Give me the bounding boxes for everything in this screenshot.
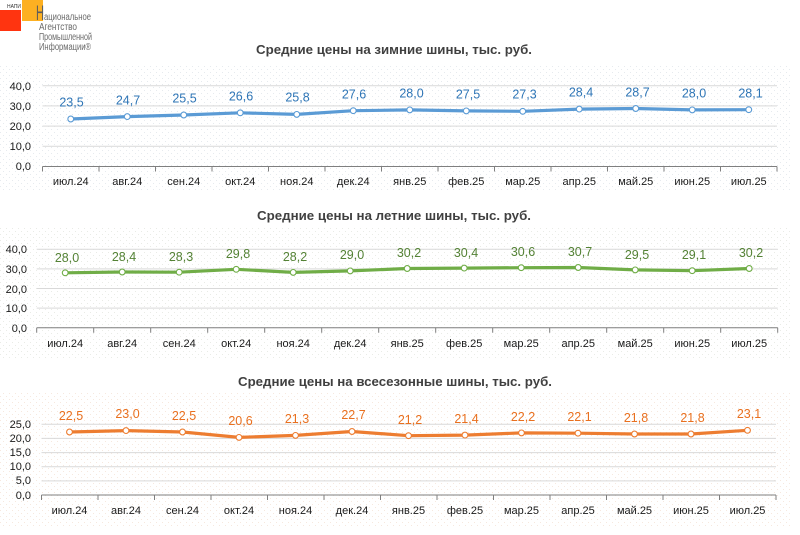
x axis labels: май.25 xyxy=(618,338,653,350)
x axis labels: ноя.24 xyxy=(280,176,313,188)
x axis labels: сен.24 xyxy=(163,338,196,350)
data labels: all-season prices: 21,2 xyxy=(398,413,422,427)
y axis labels: 20,0 xyxy=(10,121,31,133)
x axis labels: май.25 xyxy=(617,505,652,517)
data labels: winter prices: 24,7 xyxy=(116,94,140,108)
data labels: all-season prices: 22,2 xyxy=(511,410,535,424)
x axis labels: апр.25 xyxy=(561,505,595,517)
data labels: summer prices: 28,0 xyxy=(55,251,79,265)
panel: all-season tires chart xyxy=(0,393,790,527)
line series: winter prices xyxy=(68,106,752,122)
x axis labels: июл.24 xyxy=(47,338,83,350)
data labels: summer prices: 28,4 xyxy=(112,250,136,264)
line series: summer prices xyxy=(62,265,752,276)
x axis labels: июн.25 xyxy=(674,176,710,188)
data labels: all-season prices: 22,7 xyxy=(341,408,366,422)
logo: НАПИ xyxy=(7,4,21,10)
x axis labels: мар.25 xyxy=(504,338,539,350)
data labels: summer prices xyxy=(55,245,763,265)
y axis labels: 0,0 xyxy=(16,490,31,502)
x axis labels xyxy=(47,338,767,350)
y axis labels: 30,0 xyxy=(6,264,27,276)
data labels: summer prices: 29,5 xyxy=(625,248,649,262)
y axis labels xyxy=(10,419,31,502)
x axis labels: фев.25 xyxy=(447,505,483,517)
data labels: winter prices: 28,1 xyxy=(738,86,763,100)
x axis labels: июл.25 xyxy=(731,176,767,188)
x axis labels: апр.25 xyxy=(561,338,595,350)
y axis labels: 5,0 xyxy=(16,475,31,487)
data labels: winter prices: 25,8 xyxy=(285,90,310,104)
y axis labels: 30,0 xyxy=(10,101,31,113)
data labels: all-season prices: 21,8 xyxy=(680,411,705,425)
data labels: summer prices: 29,0 xyxy=(340,248,364,262)
data labels: summer prices: 30,4 xyxy=(454,246,478,260)
y axis labels: 20,0 xyxy=(6,284,27,296)
x axis labels: фев.25 xyxy=(446,338,482,350)
logo: ациональное xyxy=(44,12,91,23)
data labels: winter prices xyxy=(59,86,763,110)
x axis labels: дек.24 xyxy=(334,338,367,350)
data labels: all-season prices xyxy=(59,407,761,428)
x axis labels: дек.24 xyxy=(336,505,368,517)
data labels: summer prices: 30,2 xyxy=(397,246,421,260)
x axis labels: июл.24 xyxy=(52,505,87,517)
x axis labels: авг.24 xyxy=(111,505,141,517)
x axis labels: июл.25 xyxy=(731,338,767,350)
data labels: summer prices: 29,1 xyxy=(682,248,706,262)
x axis labels: ноя.24 xyxy=(276,338,310,350)
y axis labels: 25,0 xyxy=(10,419,31,431)
data labels: all-season prices: 21,8 xyxy=(624,411,648,425)
x axis labels: окт.24 xyxy=(225,176,255,188)
logo: Информации® xyxy=(39,41,91,53)
title: winter tires: Средние цены на зимние шины, тыс. руб. xyxy=(256,43,532,57)
y axis labels: 40,0 xyxy=(10,81,31,93)
y axis labels xyxy=(10,81,31,173)
data labels: all-season prices: 22,5 xyxy=(59,409,83,423)
data labels: summer prices: 30,2 xyxy=(739,246,763,260)
y axis labels: 20,0 xyxy=(10,433,31,445)
data labels: winter prices: 28,7 xyxy=(625,86,650,100)
data labels: summer prices: 30,6 xyxy=(511,245,535,259)
data labels: winter prices: 23,5 xyxy=(59,96,84,110)
data labels: all-season prices: 22,5 xyxy=(172,409,196,423)
x axis labels: дек.24 xyxy=(337,176,370,188)
x axis labels: июн.25 xyxy=(674,338,710,350)
data labels: winter prices: 27,6 xyxy=(342,88,366,102)
line series: all-season prices xyxy=(67,427,750,440)
x axis labels: фев.25 xyxy=(448,176,484,188)
data labels: summer prices: 28,2 xyxy=(283,250,307,264)
x axis labels: июн.25 xyxy=(673,505,709,517)
y axis labels xyxy=(6,244,27,335)
data labels: winter prices: 27,3 xyxy=(512,88,537,102)
y axis labels: 40,0 xyxy=(6,244,27,256)
x axis labels: июл.25 xyxy=(730,505,765,517)
data labels: summer prices: 29,8 xyxy=(226,247,250,261)
data labels: winter prices: 26,6 xyxy=(229,90,253,104)
data labels: winter prices: 25,5 xyxy=(172,92,197,106)
title: all-season tires: Средние цены на всесезонные шины, тыс. руб. xyxy=(238,375,552,389)
logo: Промышленной xyxy=(39,32,92,43)
x axis labels: сен.24 xyxy=(167,176,200,188)
x axis labels: апр.25 xyxy=(563,176,596,188)
data labels: all-season prices: 23,1 xyxy=(737,407,761,421)
y axis labels: 10,0 xyxy=(10,461,31,473)
x axis labels: янв.25 xyxy=(391,338,424,350)
x axis labels: авг.24 xyxy=(107,338,137,350)
logo: Н xyxy=(36,2,44,25)
x axis labels: окт.24 xyxy=(224,505,254,517)
data labels: all-season prices: 22,1 xyxy=(567,410,592,424)
title: summer tires: Средние цены на летние шины, тыс. руб. xyxy=(257,209,531,223)
data labels: summer prices: 28,3 xyxy=(169,250,193,264)
data labels: all-season prices: 23,0 xyxy=(115,407,140,421)
y axis labels: 15,0 xyxy=(10,447,31,459)
data labels: summer prices: 30,7 xyxy=(568,245,592,259)
data labels: all-season prices: 21,3 xyxy=(285,412,309,426)
x axis labels: янв.25 xyxy=(392,505,425,517)
data labels: winter prices: 28,0 xyxy=(682,86,706,100)
x axis labels: июл.24 xyxy=(53,176,89,188)
logo xyxy=(0,0,92,53)
data labels: winter prices: 28,4 xyxy=(569,86,593,100)
logo: Агентство xyxy=(39,22,77,33)
data labels: all-season prices: 20,6 xyxy=(228,414,253,428)
x axis labels: янв.25 xyxy=(393,176,426,188)
data labels: all-season prices: 21,4 xyxy=(454,412,479,426)
data labels: winter prices: 27,5 xyxy=(456,88,480,102)
y axis labels: 0,0 xyxy=(16,161,31,173)
x axis labels: сен.24 xyxy=(166,505,199,517)
x axis labels: авг.24 xyxy=(112,176,142,188)
panel: summer tires chart xyxy=(0,228,790,359)
x axis labels: ноя.24 xyxy=(279,505,312,517)
x axis labels xyxy=(52,505,765,517)
data labels: winter prices: 28,0 xyxy=(399,86,424,100)
x axis labels: мар.25 xyxy=(505,176,540,188)
panel: winter tires chart xyxy=(0,65,792,192)
y axis labels: 0,0 xyxy=(12,323,27,335)
x axis labels xyxy=(53,176,767,188)
x axis labels: окт.24 xyxy=(221,338,251,350)
y axis labels: 10,0 xyxy=(10,141,31,153)
y axis labels: 10,0 xyxy=(6,303,27,315)
x axis labels: май.25 xyxy=(618,176,653,188)
x axis labels: мар.25 xyxy=(504,505,539,517)
